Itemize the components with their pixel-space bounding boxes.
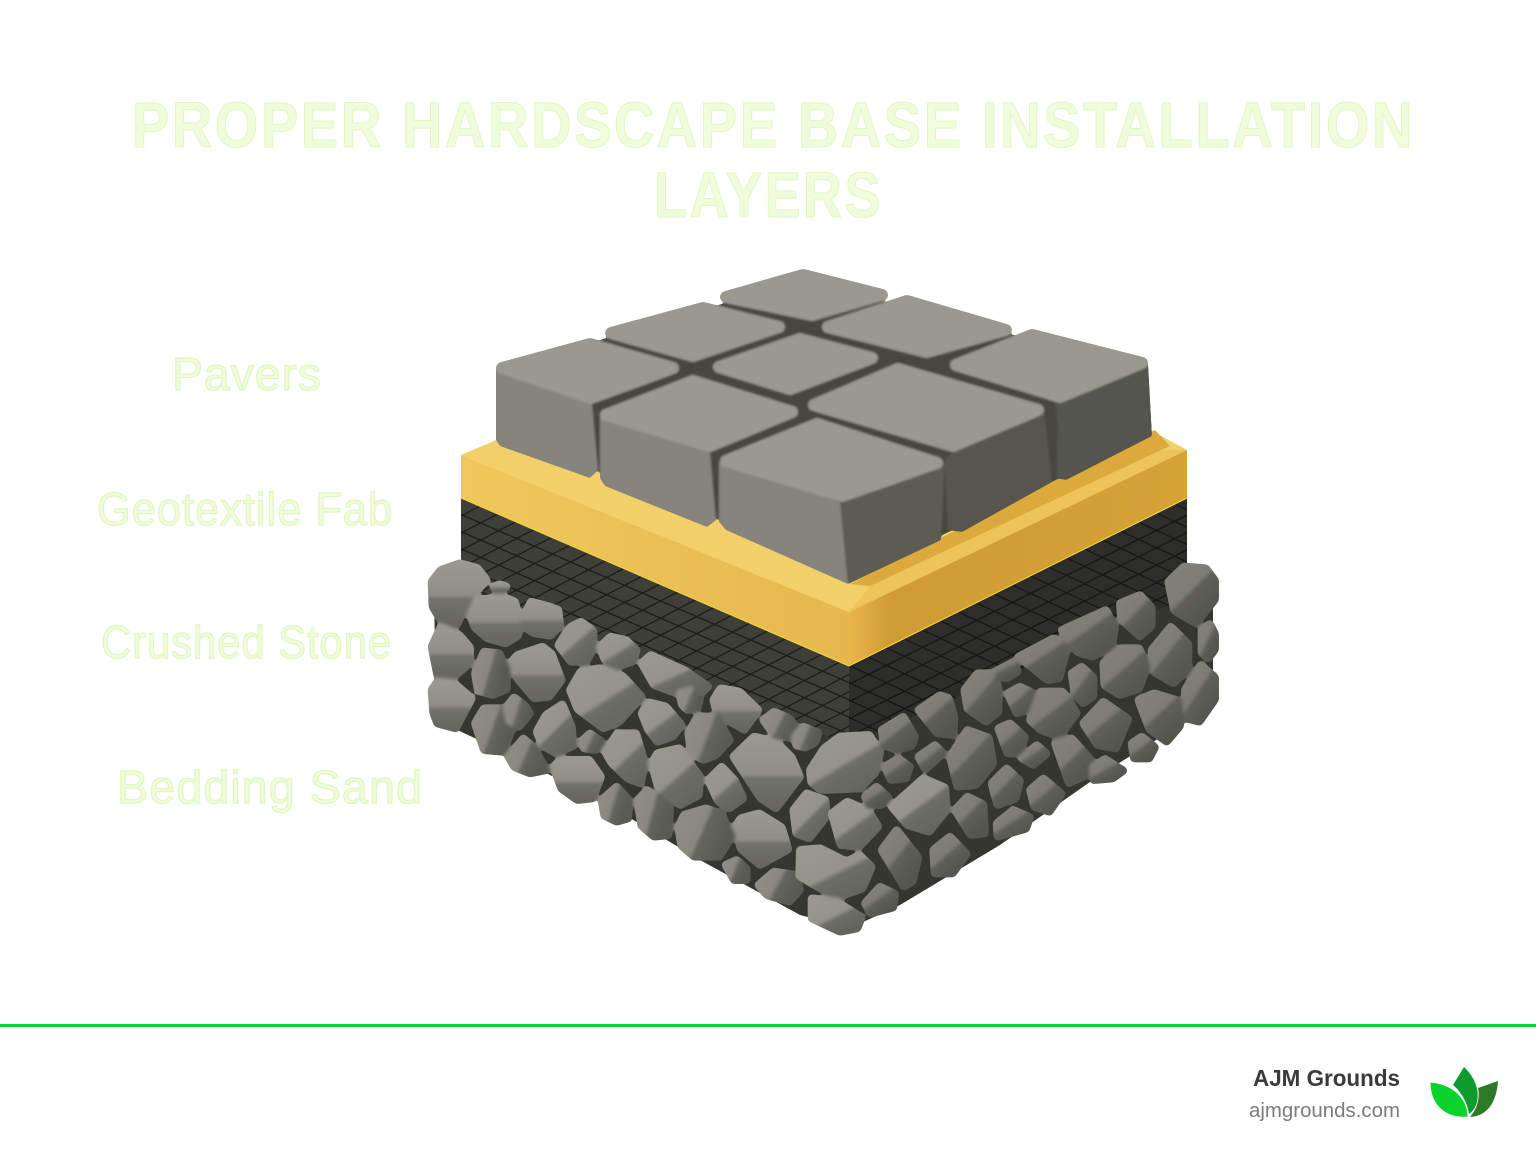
footer divider — [0, 1024, 1536, 1027]
geotextile mesh layer — [461, 498, 1187, 765]
paver: left — [496, 344, 673, 478]
paver: back right — [828, 301, 1006, 352]
paver: middle — [814, 369, 1052, 532]
layered base diagram — [432, 275, 1215, 932]
title — [132, 89, 1415, 231]
crushed stone layer — [432, 563, 1215, 932]
paver: back left — [611, 308, 779, 356]
paver: front — [719, 424, 945, 584]
label: bedding sand: Bedding Sand — [117, 761, 423, 813]
paver: front left — [600, 381, 792, 527]
paver: right — [956, 335, 1152, 480]
title: LAYERS — [654, 159, 883, 231]
slab left face — [461, 455, 849, 666]
layer labels — [97, 348, 423, 813]
icon: leaf logo — [1430, 1067, 1498, 1117]
paver: centre — [719, 339, 872, 389]
paver: back — [726, 275, 882, 315]
bedding sand layer (yellow slab) — [461, 430, 1187, 666]
slab right face — [849, 450, 1187, 666]
footer brand text — [1249, 1065, 1400, 1122]
brand name: AJM Grounds — [1253, 1065, 1400, 1091]
label: crushed stone: Crushed Stone — [101, 616, 392, 668]
slab top surface — [461, 430, 1187, 612]
label: geotextile fabric: Geotextile Fab — [97, 483, 393, 535]
pavers layer — [496, 275, 1152, 584]
brand url: ajmgrounds.com — [1249, 1099, 1400, 1122]
label: pavers: Pavers — [172, 348, 322, 400]
